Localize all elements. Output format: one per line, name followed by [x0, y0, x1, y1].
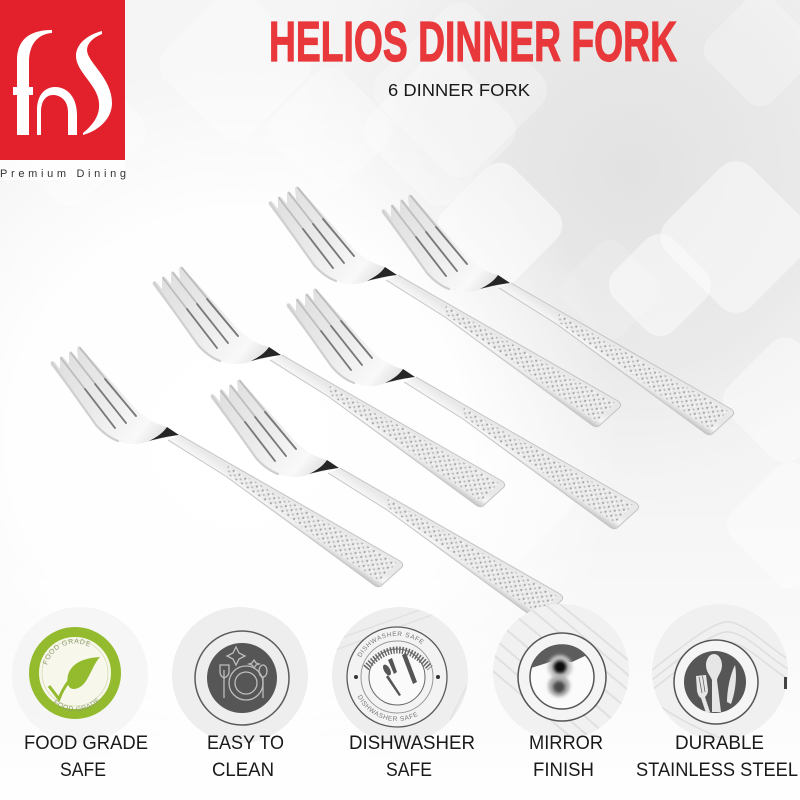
- icon: food grade badge: [29, 627, 121, 719]
- feature: dishwasher safe: [332, 607, 475, 781]
- subtitle: 6 DINNER FORK: [388, 80, 530, 100]
- label: [24, 732, 148, 781]
- icon: food grade badge: FOOD GRADE: [54, 698, 100, 712]
- logo: FnS red block: [0, 0, 125, 160]
- feature: food grade safe: [24, 627, 148, 781]
- label: [636, 732, 798, 781]
- icon: dishwasher stamp: [332, 607, 468, 743]
- feature: durable stainless steel: [636, 604, 798, 781]
- feature: easy to clean: [172, 607, 308, 781]
- label: [207, 732, 284, 781]
- icon: mirror reflection: [493, 604, 629, 740]
- label: MIRROR: [529, 732, 603, 754]
- label: EASY TO: [207, 732, 284, 754]
- fork 4: [287, 288, 639, 529]
- icon: plate with sparkles: [172, 607, 308, 743]
- fork 1: [51, 346, 403, 587]
- label: DISHWASHER: [349, 732, 475, 754]
- logo tagline: [0, 160, 126, 180]
- fork 2: [211, 379, 563, 620]
- icon: dishwasher stamp: DISHWASHER SAFE: [357, 632, 424, 658]
- label: SAFE: [60, 759, 106, 781]
- label: [529, 732, 603, 781]
- fork 3: [153, 266, 505, 507]
- icon: cutlery: [652, 604, 790, 742]
- fork 6: [382, 194, 734, 435]
- feature: mirror finish: [493, 604, 629, 776]
- icon: dishwasher stamp: DISHWASHER SAFE: [358, 694, 418, 721]
- label: FOOD GRADE: [24, 732, 148, 754]
- label: DURABLE: [675, 732, 764, 754]
- label: [349, 732, 475, 781]
- fork 5: [269, 186, 621, 427]
- icon: food grade badge: FOOD GRADE: [42, 638, 91, 665]
- label: FINISH: [533, 759, 594, 781]
- label: SAFE: [386, 759, 432, 781]
- label: CLEAN: [212, 759, 274, 781]
- logo tagline: Premium Dining: [0, 168, 126, 180]
- small dark mark: [784, 677, 787, 689]
